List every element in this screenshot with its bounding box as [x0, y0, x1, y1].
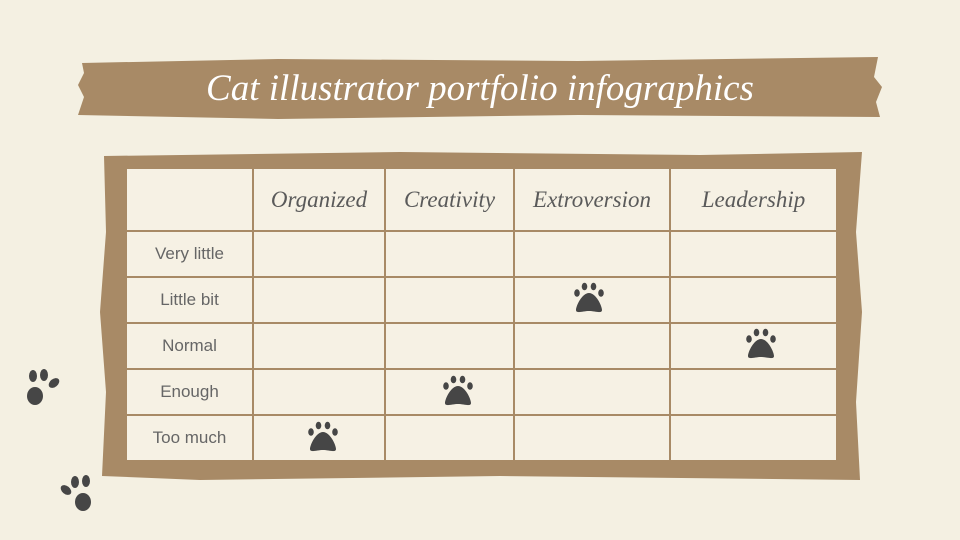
comparison table: Very little	[155, 244, 224, 263]
title: Cat illustrator portfolio infographics	[206, 68, 754, 109]
comparison table: Too much	[153, 428, 226, 447]
table frame	[100, 152, 862, 480]
icon: paw creativity enough	[443, 376, 473, 406]
comparison table: Creativity	[404, 186, 495, 212]
comparison table	[125, 167, 838, 462]
comparison table: Little bit	[160, 290, 219, 309]
comparison table: Extroversion	[533, 186, 651, 212]
title banner	[78, 57, 882, 119]
comparison table: Leadership	[702, 186, 805, 212]
icon: paw organized too much	[308, 422, 338, 452]
icon: decorative paw left	[27, 369, 60, 405]
icon: decorative paw bottom	[60, 475, 91, 511]
comparison table: Organized	[271, 186, 367, 212]
comparison table: Normal	[162, 336, 217, 355]
icon: paw leadership normal	[746, 328, 776, 358]
icon: paw extroversion little bit	[574, 282, 604, 312]
comparison table: Enough	[160, 382, 219, 401]
